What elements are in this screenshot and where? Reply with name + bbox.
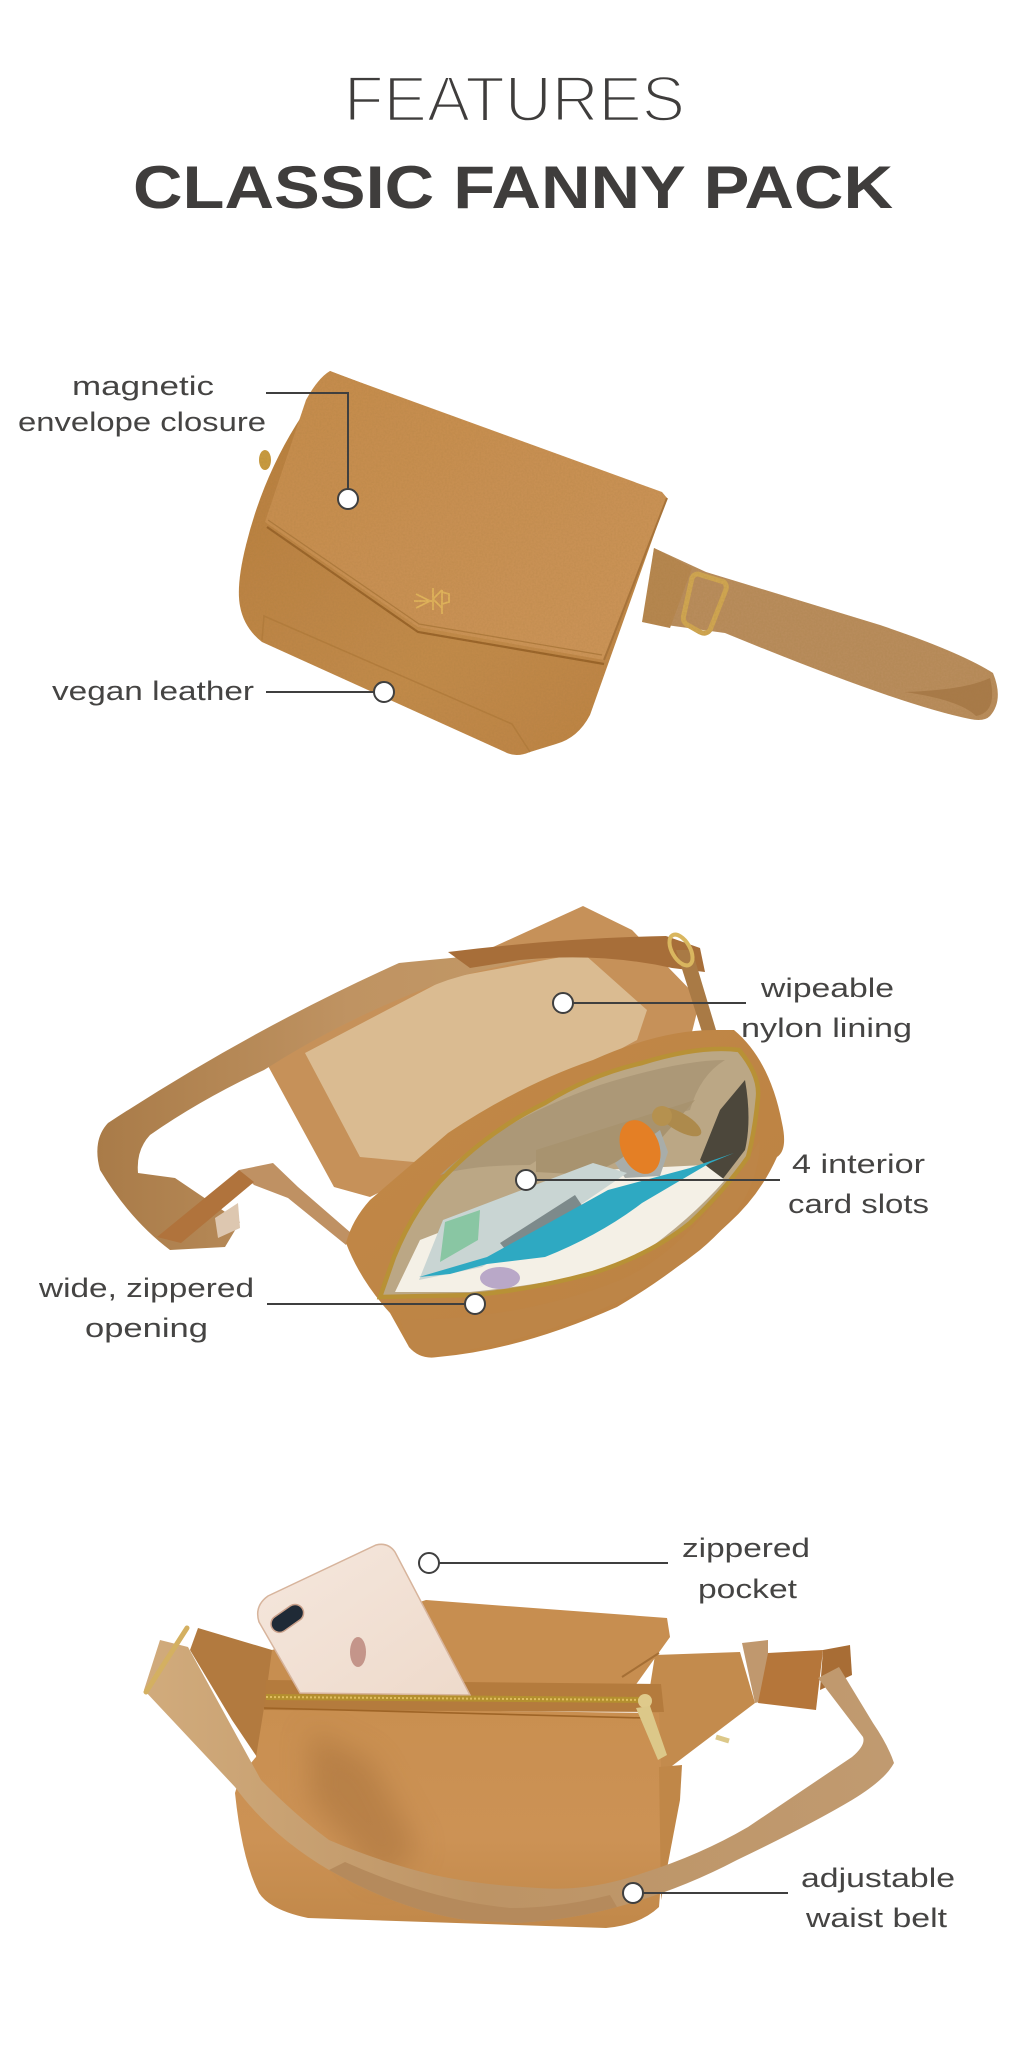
belt strap	[144, 1640, 894, 1923]
label: wipeable	[760, 973, 894, 1003]
label	[788, 1149, 929, 1219]
zipper pull	[636, 1694, 667, 1760]
pocket stitching	[264, 1708, 645, 1718]
dark gap on the right	[700, 1080, 748, 1180]
phone logo	[350, 1637, 366, 1667]
lower pouch shade	[400, 1140, 760, 1356]
bag body	[239, 371, 667, 755]
nylon lining	[305, 953, 647, 1162]
panel: bag front view	[239, 371, 998, 755]
pocket band	[264, 1680, 664, 1712]
label	[741, 973, 912, 1043]
label: nylon lining	[741, 1013, 912, 1043]
right belt buckle	[742, 1640, 852, 1710]
leader line	[267, 1303, 465, 1305]
panel: bag open interior view	[97, 906, 784, 1358]
upper flap	[266, 1600, 670, 1695]
label: card slots	[788, 1189, 929, 1219]
callout: vegan leather	[52, 676, 394, 706]
label	[18, 371, 266, 437]
callout: magnetic envelope closure	[18, 371, 358, 509]
bag body	[235, 1708, 662, 1928]
interior opening	[380, 1049, 758, 1297]
pacifier nipple	[655, 1102, 705, 1142]
gold side snap	[259, 450, 271, 470]
phone	[258, 1544, 470, 1695]
subtitle: CLASSIC FANNY PACK: CLASSIC FANNY PACK	[133, 154, 893, 221]
left side wing	[190, 1628, 275, 1760]
phone camera	[268, 1601, 307, 1636]
title: FEATURES: FEATURES	[344, 63, 685, 135]
callout: 4 interior card slots	[516, 1149, 929, 1219]
gold strap buckle	[683, 574, 726, 633]
open flap	[261, 906, 700, 1197]
right edge shade	[659, 1765, 682, 1900]
label: wide, zippered	[38, 1273, 254, 1303]
strap drop to pouch	[676, 950, 716, 1032]
belt strap	[644, 548, 998, 720]
label: adjustable	[801, 1863, 955, 1893]
leader line	[536, 1179, 780, 1181]
label: envelope closure	[18, 407, 266, 437]
gold strap ring	[146, 1628, 187, 1692]
label: magnetic	[72, 371, 214, 401]
label	[801, 1863, 955, 1933]
leader line	[439, 1562, 668, 1564]
flap right edge	[604, 498, 667, 660]
panel: bag back view with phone	[144, 1544, 894, 1928]
body shadow	[310, 1730, 420, 1880]
blue packet	[419, 1153, 734, 1277]
belt strap loop	[97, 945, 600, 1250]
marker dot	[623, 1883, 643, 1903]
dark upper strap section	[448, 936, 705, 972]
callout: wide, zippered opening	[38, 1273, 485, 1343]
leader line	[266, 691, 375, 693]
callout: zippered pocket	[419, 1533, 810, 1604]
marker dot	[419, 1553, 439, 1573]
interior shade	[440, 1060, 725, 1175]
marker dot	[374, 682, 394, 702]
label	[682, 1533, 810, 1604]
marker dot	[516, 1170, 536, 1190]
callout: adjustable waist belt	[623, 1863, 955, 1933]
logo: gold monogram	[414, 588, 449, 614]
label: pocket	[698, 1574, 798, 1604]
callout: wipeable nylon lining	[553, 973, 912, 1043]
wipes packet	[419, 1163, 627, 1280]
marker dot	[553, 993, 573, 1013]
diaper	[395, 1165, 725, 1292]
marker dot	[465, 1294, 485, 1314]
label: 4 interior	[792, 1149, 925, 1179]
label	[38, 1273, 254, 1343]
card slots	[536, 1100, 695, 1175]
gold ring buckle	[665, 931, 697, 969]
bottom panel seam	[262, 616, 530, 752]
leader line	[573, 1002, 746, 1004]
zipper	[380, 1049, 758, 1297]
lower strap and clip buckle	[239, 1163, 351, 1245]
main pouch	[346, 1030, 784, 1358]
label: opening	[85, 1313, 208, 1343]
right side wing	[640, 1652, 755, 1772]
label: waist belt	[805, 1903, 948, 1933]
gold pin behind wing	[716, 1737, 729, 1741]
zipper	[266, 1697, 648, 1700]
label: zippered	[682, 1533, 810, 1563]
purple detail	[480, 1267, 520, 1289]
leader line	[266, 393, 348, 489]
flap stitching	[267, 527, 604, 664]
orange bottle	[612, 1114, 668, 1180]
marker dot	[338, 489, 358, 509]
label: vegan leather	[52, 676, 254, 706]
leader line	[643, 1892, 788, 1894]
flap	[265, 371, 667, 660]
